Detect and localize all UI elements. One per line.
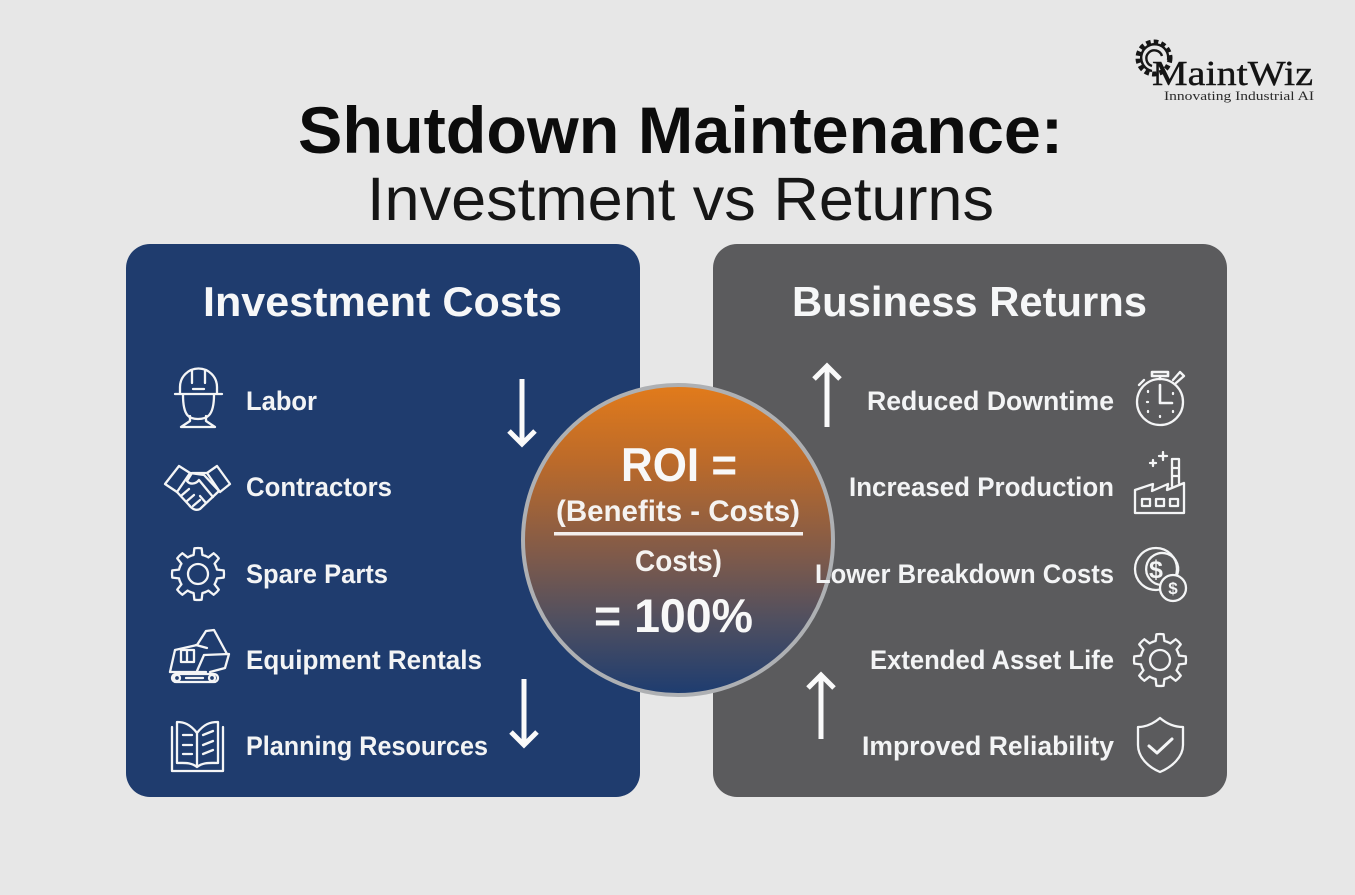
item: increased production: Increased Production <box>849 472 1114 502</box>
arrow: down upper <box>509 379 535 444</box>
panel: business returns <box>713 244 1227 797</box>
arrow: up lower <box>808 675 834 739</box>
icon: hard hat worker <box>175 368 222 427</box>
logo: MaintWiz: Innovating Industrial AI <box>1164 88 1314 103</box>
formula denominator: Costs) <box>635 545 722 578</box>
icon: gear, asset life <box>1134 634 1186 686</box>
title <box>298 93 1063 233</box>
item: equipment rentals: Equipment Rentals <box>246 645 482 675</box>
icon: open book <box>172 722 223 771</box>
circle: ROI formula <box>523 385 833 695</box>
item: reduced downtime: Reduced Downtime <box>867 386 1114 416</box>
item: improved reliability: Improved Reliability <box>862 731 1114 761</box>
title: Investment vs Returns <box>367 165 994 233</box>
formula numerator: (Benefits - Costs) <box>556 495 800 528</box>
logo: MaintWiz <box>1138 42 1314 103</box>
icon: coins: $ <box>1168 579 1178 598</box>
icon: logo gear <box>1138 42 1170 74</box>
heading: business returns: Business Returns <box>792 278 1147 325</box>
icon: factory <box>1135 452 1184 513</box>
icon: stopwatch <box>1137 372 1184 425</box>
item: extended asset life: Extended Asset Life <box>870 645 1114 675</box>
fraction line <box>554 532 803 536</box>
item: spare parts: Spare Parts <box>246 559 388 589</box>
arrow: up upper <box>814 366 840 427</box>
icon: handshake <box>165 466 230 510</box>
icon: shield check <box>1138 718 1183 772</box>
item: labor: Labor <box>246 386 317 416</box>
ROI result: = 100% <box>594 589 753 642</box>
item: planning resources: Planning Resources <box>246 731 488 761</box>
item: contractors: Contractors <box>246 472 392 502</box>
item: lower breakdown costs: Lower Breakdown Costs <box>815 559 1114 589</box>
panel: investment costs <box>126 244 640 797</box>
title: Shutdown Maintenance: <box>298 93 1063 167</box>
logo: MaintWiz: MaintWiz <box>1152 54 1313 93</box>
icon: excavator <box>170 630 229 682</box>
arrow: down lower <box>511 679 537 745</box>
heading: investment costs: Investment Costs <box>203 278 562 325</box>
list: business return items <box>815 386 1114 761</box>
ROI heading: ROI = <box>621 438 737 491</box>
icon: coins: $ <box>1149 556 1163 584</box>
icon: coins <box>1135 548 1186 601</box>
icon: gear, spare parts <box>172 548 224 600</box>
